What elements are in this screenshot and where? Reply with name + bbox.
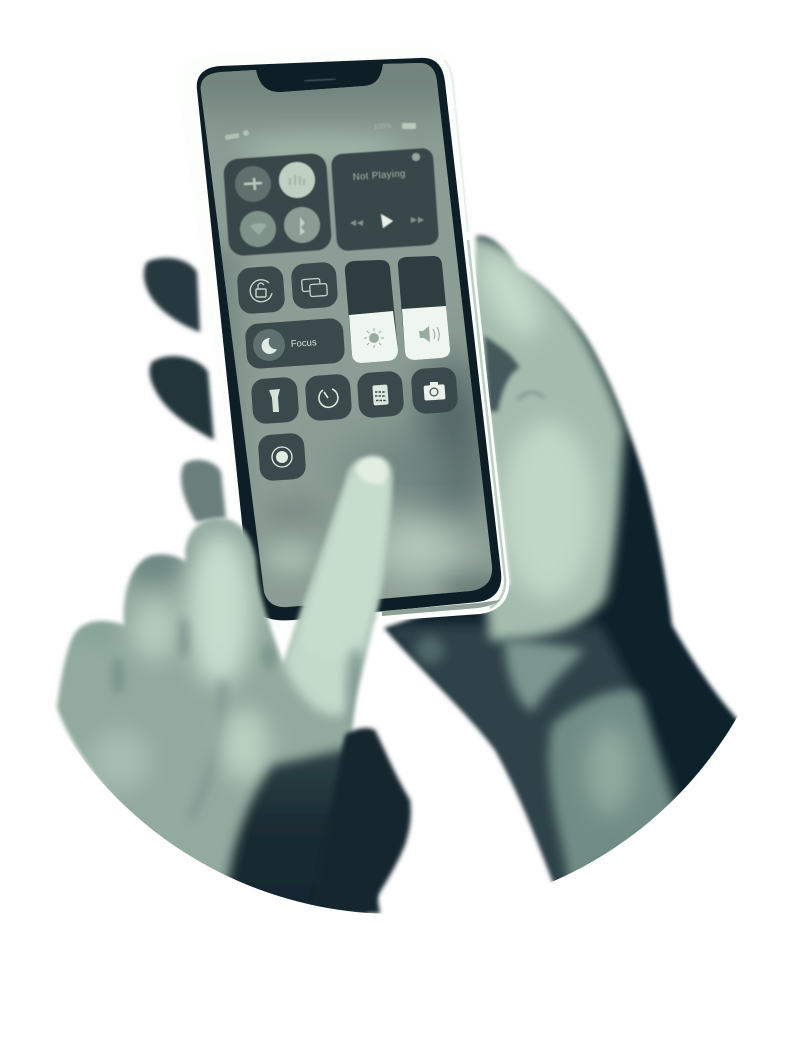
left hand <box>40 450 411 930</box>
screen soft shading <box>170 40 520 610</box>
palm shadow <box>221 742 383 914</box>
case edge upper faint <box>444 60 468 232</box>
left fingers behind phone <box>144 258 226 522</box>
music tile <box>331 148 439 251</box>
icon: play <box>381 214 393 228</box>
wrist highlight <box>586 725 634 815</box>
phone case <box>178 46 509 628</box>
lower palm midtone <box>505 640 585 712</box>
illustration: hands holding phone <box>54 58 738 914</box>
icon: cellular <box>279 162 315 198</box>
gap behind thumb <box>484 335 520 412</box>
case edge light strip <box>468 240 505 608</box>
palm highlight <box>221 709 269 781</box>
palm highlight <box>500 420 596 600</box>
music tile: Not Playing <box>352 168 406 183</box>
camera button <box>410 366 458 414</box>
status bar: 100% <box>374 123 392 131</box>
left hand base <box>54 462 392 912</box>
phone body <box>197 58 501 620</box>
thumb dark <box>310 728 411 914</box>
status bar <box>225 123 416 140</box>
flashlight button <box>251 376 300 425</box>
connectivity tile <box>223 153 332 257</box>
rotation lock button <box>236 265 286 315</box>
lower palm tone <box>384 625 690 900</box>
fingertip darkening <box>130 553 188 590</box>
index finger shade <box>346 648 366 732</box>
middle finger light <box>188 534 252 686</box>
focus button: Focus <box>290 337 317 350</box>
icon: airplane mode <box>235 166 271 202</box>
icon: wifi <box>240 211 276 247</box>
phone screen <box>201 63 492 607</box>
phone <box>196 58 510 620</box>
phone bottom edge <box>382 600 500 616</box>
screen record button <box>257 432 307 482</box>
ring finger light <box>131 600 179 660</box>
timer button <box>304 373 352 421</box>
index finger <box>283 456 393 715</box>
fingernail <box>355 456 388 484</box>
screen mirroring button <box>290 262 338 310</box>
knuckle fold <box>518 392 544 400</box>
brightness slider <box>345 260 398 363</box>
knuckle crease <box>190 680 223 820</box>
mound tone near phone <box>416 636 444 664</box>
focus button <box>245 318 345 369</box>
speaker slot <box>304 79 336 81</box>
wrist midtone <box>549 690 680 890</box>
volume slider <box>398 256 450 360</box>
right hand dark base <box>382 232 738 802</box>
right hand <box>382 232 738 883</box>
lit palm and thumb <box>465 235 624 640</box>
icon: bluetooth <box>284 207 320 243</box>
calculator button <box>357 370 405 418</box>
thumb highlight <box>476 240 546 342</box>
finger gaps <box>118 620 270 692</box>
